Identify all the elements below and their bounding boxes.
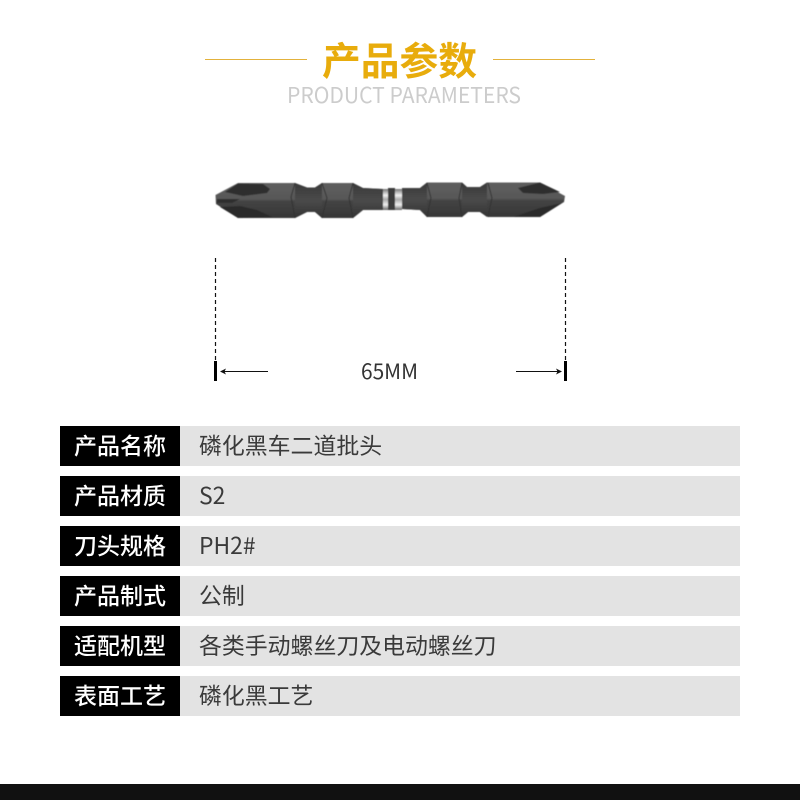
- label: 产品材质: [74, 477, 166, 511]
- spec row: surface finish: [60, 676, 740, 716]
- spec row: compatible tools: [60, 626, 740, 666]
- label: [60, 476, 180, 516]
- label: [60, 426, 180, 466]
- left end tick: [214, 361, 217, 381]
- bit body: [216, 183, 383, 218]
- value: 各类手动螺丝刀及电动螺丝刀: [199, 627, 497, 661]
- value: 公制: [199, 577, 245, 611]
- right dashed line: [564, 258, 566, 361]
- dimension graphic: 65MM: [214, 258, 567, 386]
- subtitle: PRODUCT PARAMETERS: [287, 78, 521, 110]
- right end tick: [564, 361, 567, 381]
- right arrow: [516, 368, 562, 374]
- left arrow: [220, 368, 268, 374]
- label: 表面工艺: [74, 677, 166, 711]
- label: 刀头规格: [74, 527, 166, 561]
- right tip flutes: [518, 182, 560, 194]
- label: [60, 576, 180, 616]
- value: 磷化黑车二道批头: [199, 427, 382, 461]
- spec row: product name: [60, 426, 740, 466]
- value: PH2#: [199, 527, 256, 561]
- spec row: bit size: [60, 526, 740, 566]
- label: 适配机型: [74, 627, 166, 661]
- label: [60, 676, 180, 716]
- label: [60, 626, 180, 666]
- label: 产品名称: [74, 427, 166, 461]
- label: 产品制式: [74, 577, 166, 611]
- left tip flutes: [225, 184, 270, 196]
- spec row: unit system: [60, 576, 740, 616]
- title left rule: [205, 59, 307, 60]
- label: [60, 526, 180, 566]
- left dashed line: [214, 258, 216, 361]
- hex edges: [291, 183, 492, 218]
- spec row: material: [60, 476, 740, 516]
- silver bands: [383, 189, 402, 210]
- value: 磷化黑工艺: [199, 677, 313, 711]
- dimension value: 65MM: [361, 356, 418, 386]
- necks and collars: [295, 183, 322, 218]
- header: title block: [205, 31, 595, 110]
- footer bar: [0, 784, 800, 800]
- product image: double-ended screwdriver bit: [214, 182, 566, 219]
- title: 产品参数: [322, 31, 477, 87]
- value: S2: [199, 477, 225, 511]
- title right rule: [493, 59, 595, 60]
